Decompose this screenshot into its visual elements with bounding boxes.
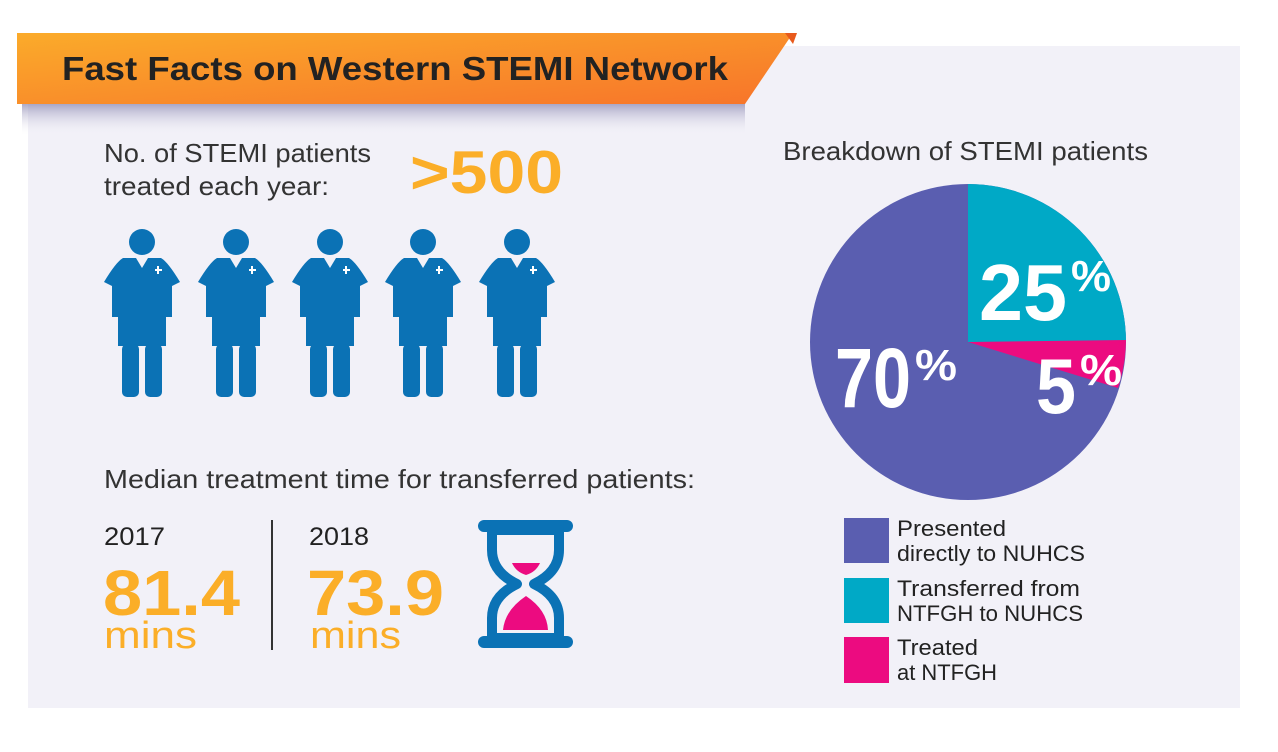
big number >500: >500	[410, 139, 563, 206]
icons: five patients	[104, 229, 555, 397]
legend: Treated	[897, 635, 978, 660]
pie chart	[810, 184, 1126, 500]
legend: Transferred from	[897, 576, 1080, 601]
icon: hourglass	[478, 520, 573, 648]
heading: breakdown: Breakdown of STEMI patients	[783, 136, 1148, 166]
pie chart: 70	[835, 331, 911, 425]
pie chart: %	[915, 341, 957, 390]
title banner	[17, 33, 797, 104]
text: patients label: No. of STEMI patients	[104, 138, 371, 168]
pie chart: 5	[1036, 342, 1076, 430]
pie chart: %	[1071, 252, 1111, 301]
stat 2017: 2017	[104, 523, 165, 551]
stat 2018	[307, 523, 444, 657]
pie chart: 25	[979, 248, 1067, 337]
stat 2018: mins	[310, 615, 401, 657]
legend: NTFGH to NUHCS	[897, 601, 1083, 626]
stat 2018: 73.9	[307, 557, 444, 629]
stat 2017: 81.4	[103, 557, 240, 629]
text: patients label: treated each year:	[104, 171, 329, 201]
title: Fast Facts on Western STEMI Network	[62, 50, 729, 87]
legend: directly to NUHCS	[897, 541, 1085, 566]
text: median treatment: Median treatment time for transferred patients:	[104, 464, 695, 494]
legend: Presented	[897, 516, 1006, 541]
stat 2017: mins	[104, 615, 197, 657]
stat 2018: 2018	[309, 523, 369, 551]
header shadow	[22, 104, 745, 135]
stat 2017	[103, 523, 240, 657]
legend	[844, 516, 1085, 685]
pie chart: %	[1080, 346, 1122, 395]
legend: at NTFGH	[897, 660, 997, 685]
